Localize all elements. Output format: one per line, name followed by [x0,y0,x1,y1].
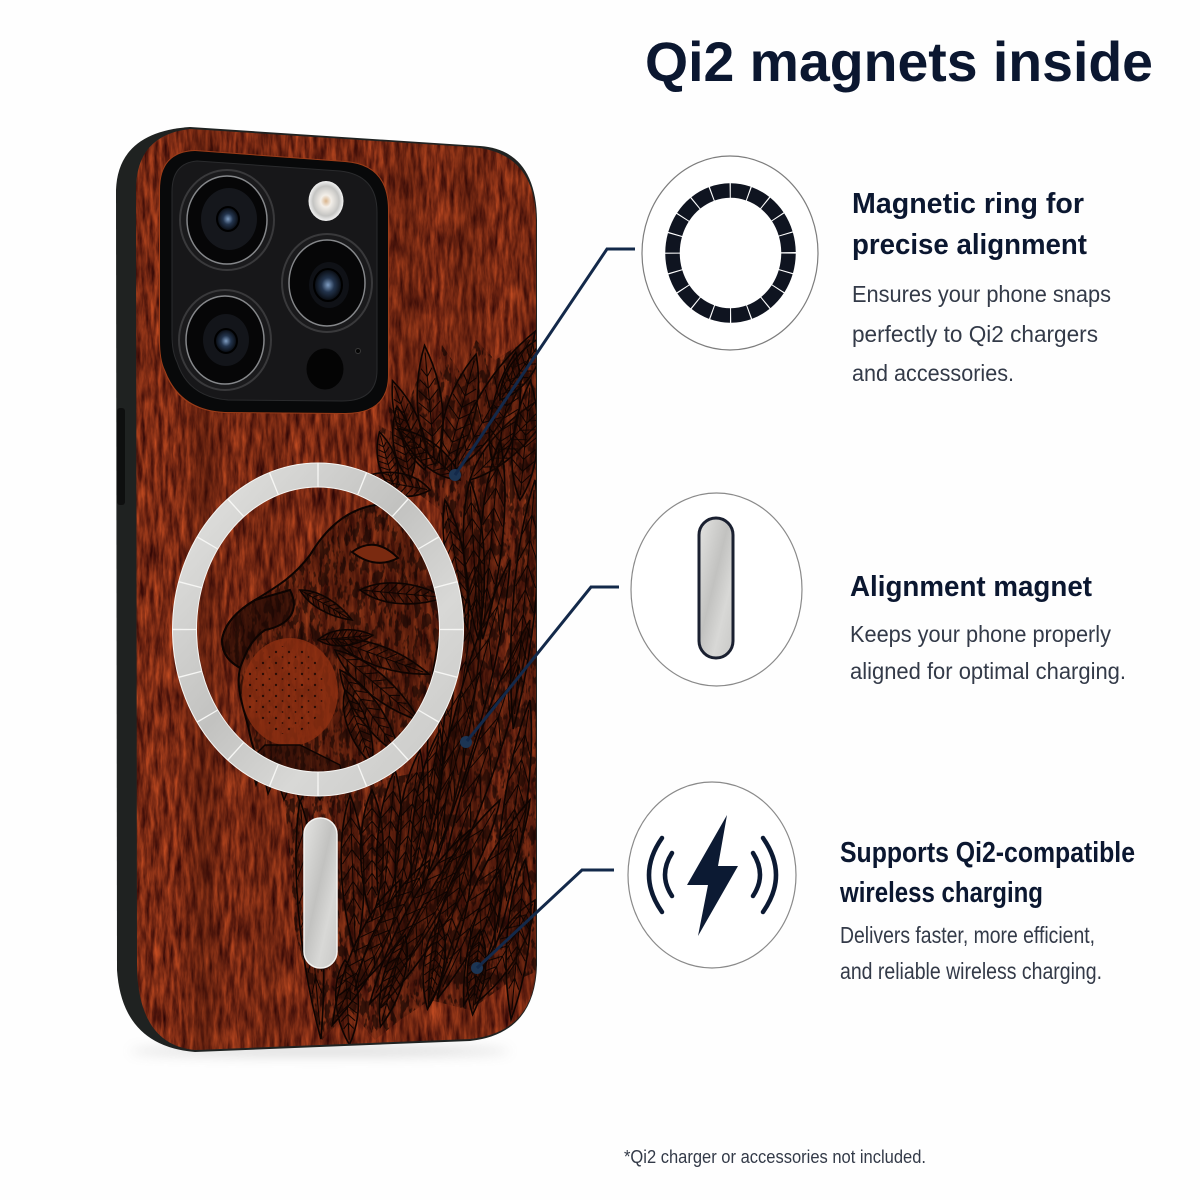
leader line: wireless charging [477,870,614,968]
icon: wireless charging bolt [628,782,796,968]
camera module [159,150,389,414]
text block: magnetic ring: perfectly to Qi2 chargers [852,321,1098,347]
alignment magnet on phone [304,818,337,968]
text block: wireless charging: wireless charging [839,877,1043,909]
magnetic ring on phone [184,475,452,784]
lion head [222,505,446,802]
leader line: alignment magnet [467,587,619,741]
ground shadow [130,1046,510,1056]
phone case product photo [116,120,635,1060]
text block: wireless charging [839,837,1135,984]
text block: alignment magnet: Keeps your phone properly [850,621,1111,647]
text block: magnetic ring: Ensures your phone snaps [852,281,1111,307]
lens bottom left [179,290,271,390]
black case edge [116,127,537,1052]
text block: wireless charging: and reliable wireless charging. [840,958,1102,984]
wood back [136,129,536,1050]
footnote: *Qi2 charger or accessories not included. [624,1147,926,1167]
eye [352,545,398,563]
mane ink texture [285,335,540,1040]
side mane leaves [422,438,536,948]
microphone [356,348,360,354]
text block: wireless charging: Delivers faster, more efficient, [840,922,1095,948]
text block: magnetic ring: Magnetic ring for [852,188,1084,220]
leader line: magnetic ring [455,249,635,475]
head ink texture [222,505,442,790]
icon: magnetic ring [642,156,818,350]
text block: magnetic ring [852,188,1111,386]
flash [308,181,344,221]
crest leaves [371,330,536,502]
text block: magnetic ring: and accessories. [852,360,1014,386]
text block: alignment magnet [850,571,1126,684]
cheek fan [298,582,436,760]
lidar sensor [306,348,344,390]
leader dots on phone [449,469,483,974]
lens right [282,234,372,332]
side button [117,408,125,505]
text block: alignment magnet: aligned for optimal charging. [850,658,1126,684]
icon: alignment magnet [631,493,802,686]
lens top left [180,170,274,270]
mane shading [285,335,540,1040]
lion engraving [221,330,536,1044]
muzzle [242,638,338,746]
title: Qi2 magnets inside [645,30,1153,93]
text block: wireless charging: Supports Qi2-compatible [840,837,1135,869]
text block: magnetic ring: precise alignment [852,229,1087,261]
snout and nose [222,590,294,668]
lower mane leaves [289,728,546,1045]
text block: alignment magnet: Alignment magnet [850,571,1092,603]
chin fringe [250,745,345,802]
